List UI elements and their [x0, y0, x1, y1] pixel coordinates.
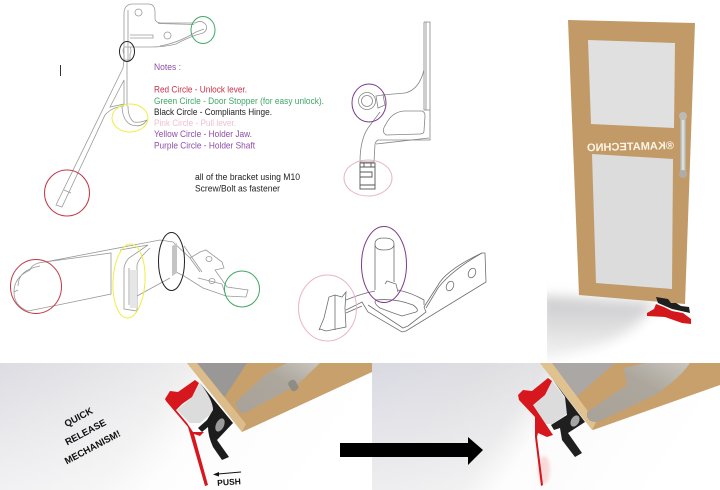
circle: green door stopper [191, 16, 215, 44]
upper window [588, 40, 675, 128]
circle: green stopper [224, 271, 260, 307]
handle post [288, 380, 298, 392]
jaw shading [130, 270, 137, 308]
circle: red unlock lever [44, 170, 90, 216]
floor [372, 363, 560, 490]
bracket slot [215, 418, 225, 432]
circle: black hinge [158, 232, 184, 290]
quick release label [64, 407, 120, 464]
drawing: perspective view of lever [14, 240, 248, 311]
quick release label: RELEASE [63, 417, 108, 448]
drawing: perspective view of shaft [319, 238, 486, 332]
circle: yellow jaw [111, 243, 147, 319]
circle: pink lever [298, 275, 356, 341]
red holder [518, 378, 553, 486]
handle recess [235, 363, 320, 413]
long lever [56, 62, 127, 207]
note: pink circle: Pink Circle - Pull lever. [154, 118, 236, 128]
circle: yellow holder jaw [112, 104, 148, 132]
drawing: top view of holder shaft [358, 22, 430, 162]
note: red circle: Red Circle - Unlock lever. [154, 84, 247, 94]
red holder [165, 380, 208, 486]
hinge [123, 47, 131, 68]
bracket plate [124, 4, 207, 62]
pull lever grip [360, 163, 375, 189]
lower window [592, 154, 673, 289]
fastener note: all of the bracket using M10 [195, 172, 300, 182]
door edge [540, 363, 596, 430]
door stopper [647, 297, 691, 324]
photo: after release [372, 363, 720, 490]
red glow [538, 456, 550, 484]
fastener note line 2: Screw/Bolt as fastener [195, 184, 280, 194]
circle: black compliant hinge [120, 42, 134, 62]
push label: PUSH [217, 476, 241, 488]
bracket slot [570, 415, 580, 427]
push arrow [213, 472, 241, 476]
circle: purple shaft [362, 226, 406, 302]
circle: red lever end [10, 260, 62, 314]
holder inner [533, 381, 567, 424]
door edge [187, 363, 246, 432]
holder jaw [122, 106, 147, 126]
door window inset [552, 363, 615, 398]
door bottom [540, 363, 720, 430]
quick release label: MECHANISM! [63, 428, 123, 467]
door window inset [197, 363, 247, 398]
circle: purple holder shaft [352, 84, 386, 122]
photo: before release [0, 363, 372, 490]
bolt holes [135, 9, 171, 39]
floor fade [0, 432, 103, 490]
floor fade [372, 423, 493, 490]
floor [0, 363, 208, 490]
hinge slot shading [172, 243, 177, 276]
door bottom [187, 363, 372, 432]
notes heading: Notes : [154, 62, 181, 72]
black bracket [198, 383, 233, 460]
arrow: before to after [340, 437, 483, 465]
holder inner [177, 383, 213, 423]
door panel [568, 20, 695, 304]
handle recess [587, 363, 690, 422]
note: green circle: Green Circle - Door Stopper (for easy unlock). [154, 96, 324, 106]
door handle [679, 112, 687, 178]
quick release label: QUICK [63, 406, 95, 430]
floor shadow [540, 296, 655, 362]
door render [540, 20, 695, 362]
note: purple circle: Purple Circle - Holder Shaft [154, 140, 255, 150]
note: black circle: Black Circle - Compliants Hinge. [154, 107, 272, 117]
notes [154, 62, 324, 194]
note: yellow circle: Yellow Circle - Holder Jaw. [154, 129, 252, 139]
cursor mark [60, 65, 61, 76]
black bracket [551, 380, 585, 457]
mirrored brand text: ®KAMATECHNO [586, 140, 674, 154]
circle: pink pull lever [344, 160, 392, 196]
drawing: side view of holder with circled parts [56, 4, 207, 207]
